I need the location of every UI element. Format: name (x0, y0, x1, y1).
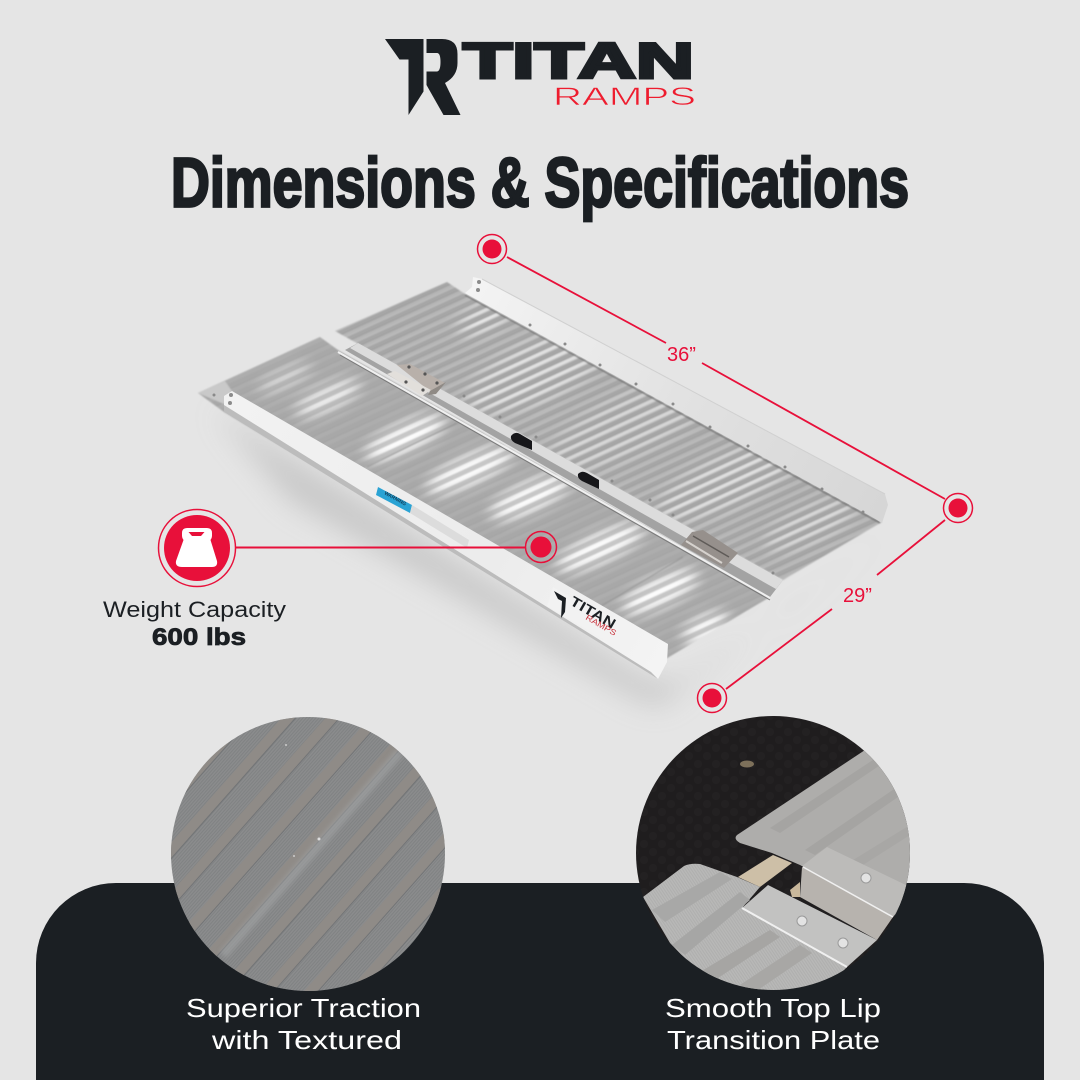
upper ramp panel (335, 282, 882, 580)
rivets (212, 280, 864, 574)
lower ramp panel (198, 336, 768, 658)
upper side rail (465, 277, 888, 523)
caption (186, 993, 421, 1055)
upper plate (736, 750, 920, 917)
caption: Transition Plate (667, 1025, 880, 1055)
caption: Smooth Top Lip (665, 993, 881, 1023)
logo wordmark TITAN: TITAN (463, 32, 694, 89)
icon: kettlebell weight (158, 510, 236, 586)
upper bracket front (800, 867, 893, 940)
caption (665, 993, 881, 1055)
ramp logo sticker: RAMPS (584, 613, 618, 638)
lower bracket (742, 885, 877, 967)
upper bracket top (802, 847, 910, 917)
warning sticker (376, 487, 469, 548)
feature: transition plate (630, 710, 920, 1055)
center hinge strip (345, 343, 783, 597)
ramp illustration (190, 270, 900, 705)
lower plate (643, 864, 847, 995)
caption: Superior Traction (186, 993, 421, 1023)
ramp marker (526, 532, 556, 562)
logo wordmark RAMPS: RAMPS (553, 83, 696, 111)
warning sticker: WARNING (383, 491, 407, 508)
right hinge (681, 530, 738, 568)
leader line (236, 546, 526, 548)
label 29 inches: 29” (843, 585, 872, 607)
plate close-up (636, 716, 910, 990)
marker top (478, 234, 506, 264)
lower side rail (224, 391, 668, 679)
ramp logo sticker (547, 587, 622, 646)
label: weight capacity: Weight Capacity (103, 597, 286, 622)
ramp logo sticker: TITAN (568, 593, 619, 632)
logo mark (385, 39, 460, 115)
black clip 1 (511, 433, 532, 450)
value: 600 lbs: 600 lbs (152, 624, 246, 651)
label 36 inches: 36” (667, 344, 696, 366)
wood gap (738, 855, 792, 887)
dark bottom panel (36, 883, 1044, 1080)
screws (797, 873, 871, 948)
logo: Titan Ramps (385, 32, 696, 115)
dimension: 36 inch length (478, 234, 945, 499)
left hinge (387, 364, 446, 396)
ramp shadow (215, 410, 890, 705)
mat hole (740, 760, 754, 768)
marker corner (944, 494, 972, 522)
textured surface close-up (171, 717, 445, 991)
black clip 2 (578, 472, 599, 489)
marker bottom (698, 684, 726, 712)
weight capacity callout (103, 510, 556, 651)
caption: with Textured (211, 1025, 402, 1055)
hinge rod (338, 352, 770, 600)
dimension: 29 inch width (698, 494, 972, 712)
feature: superior traction (171, 717, 445, 1050)
